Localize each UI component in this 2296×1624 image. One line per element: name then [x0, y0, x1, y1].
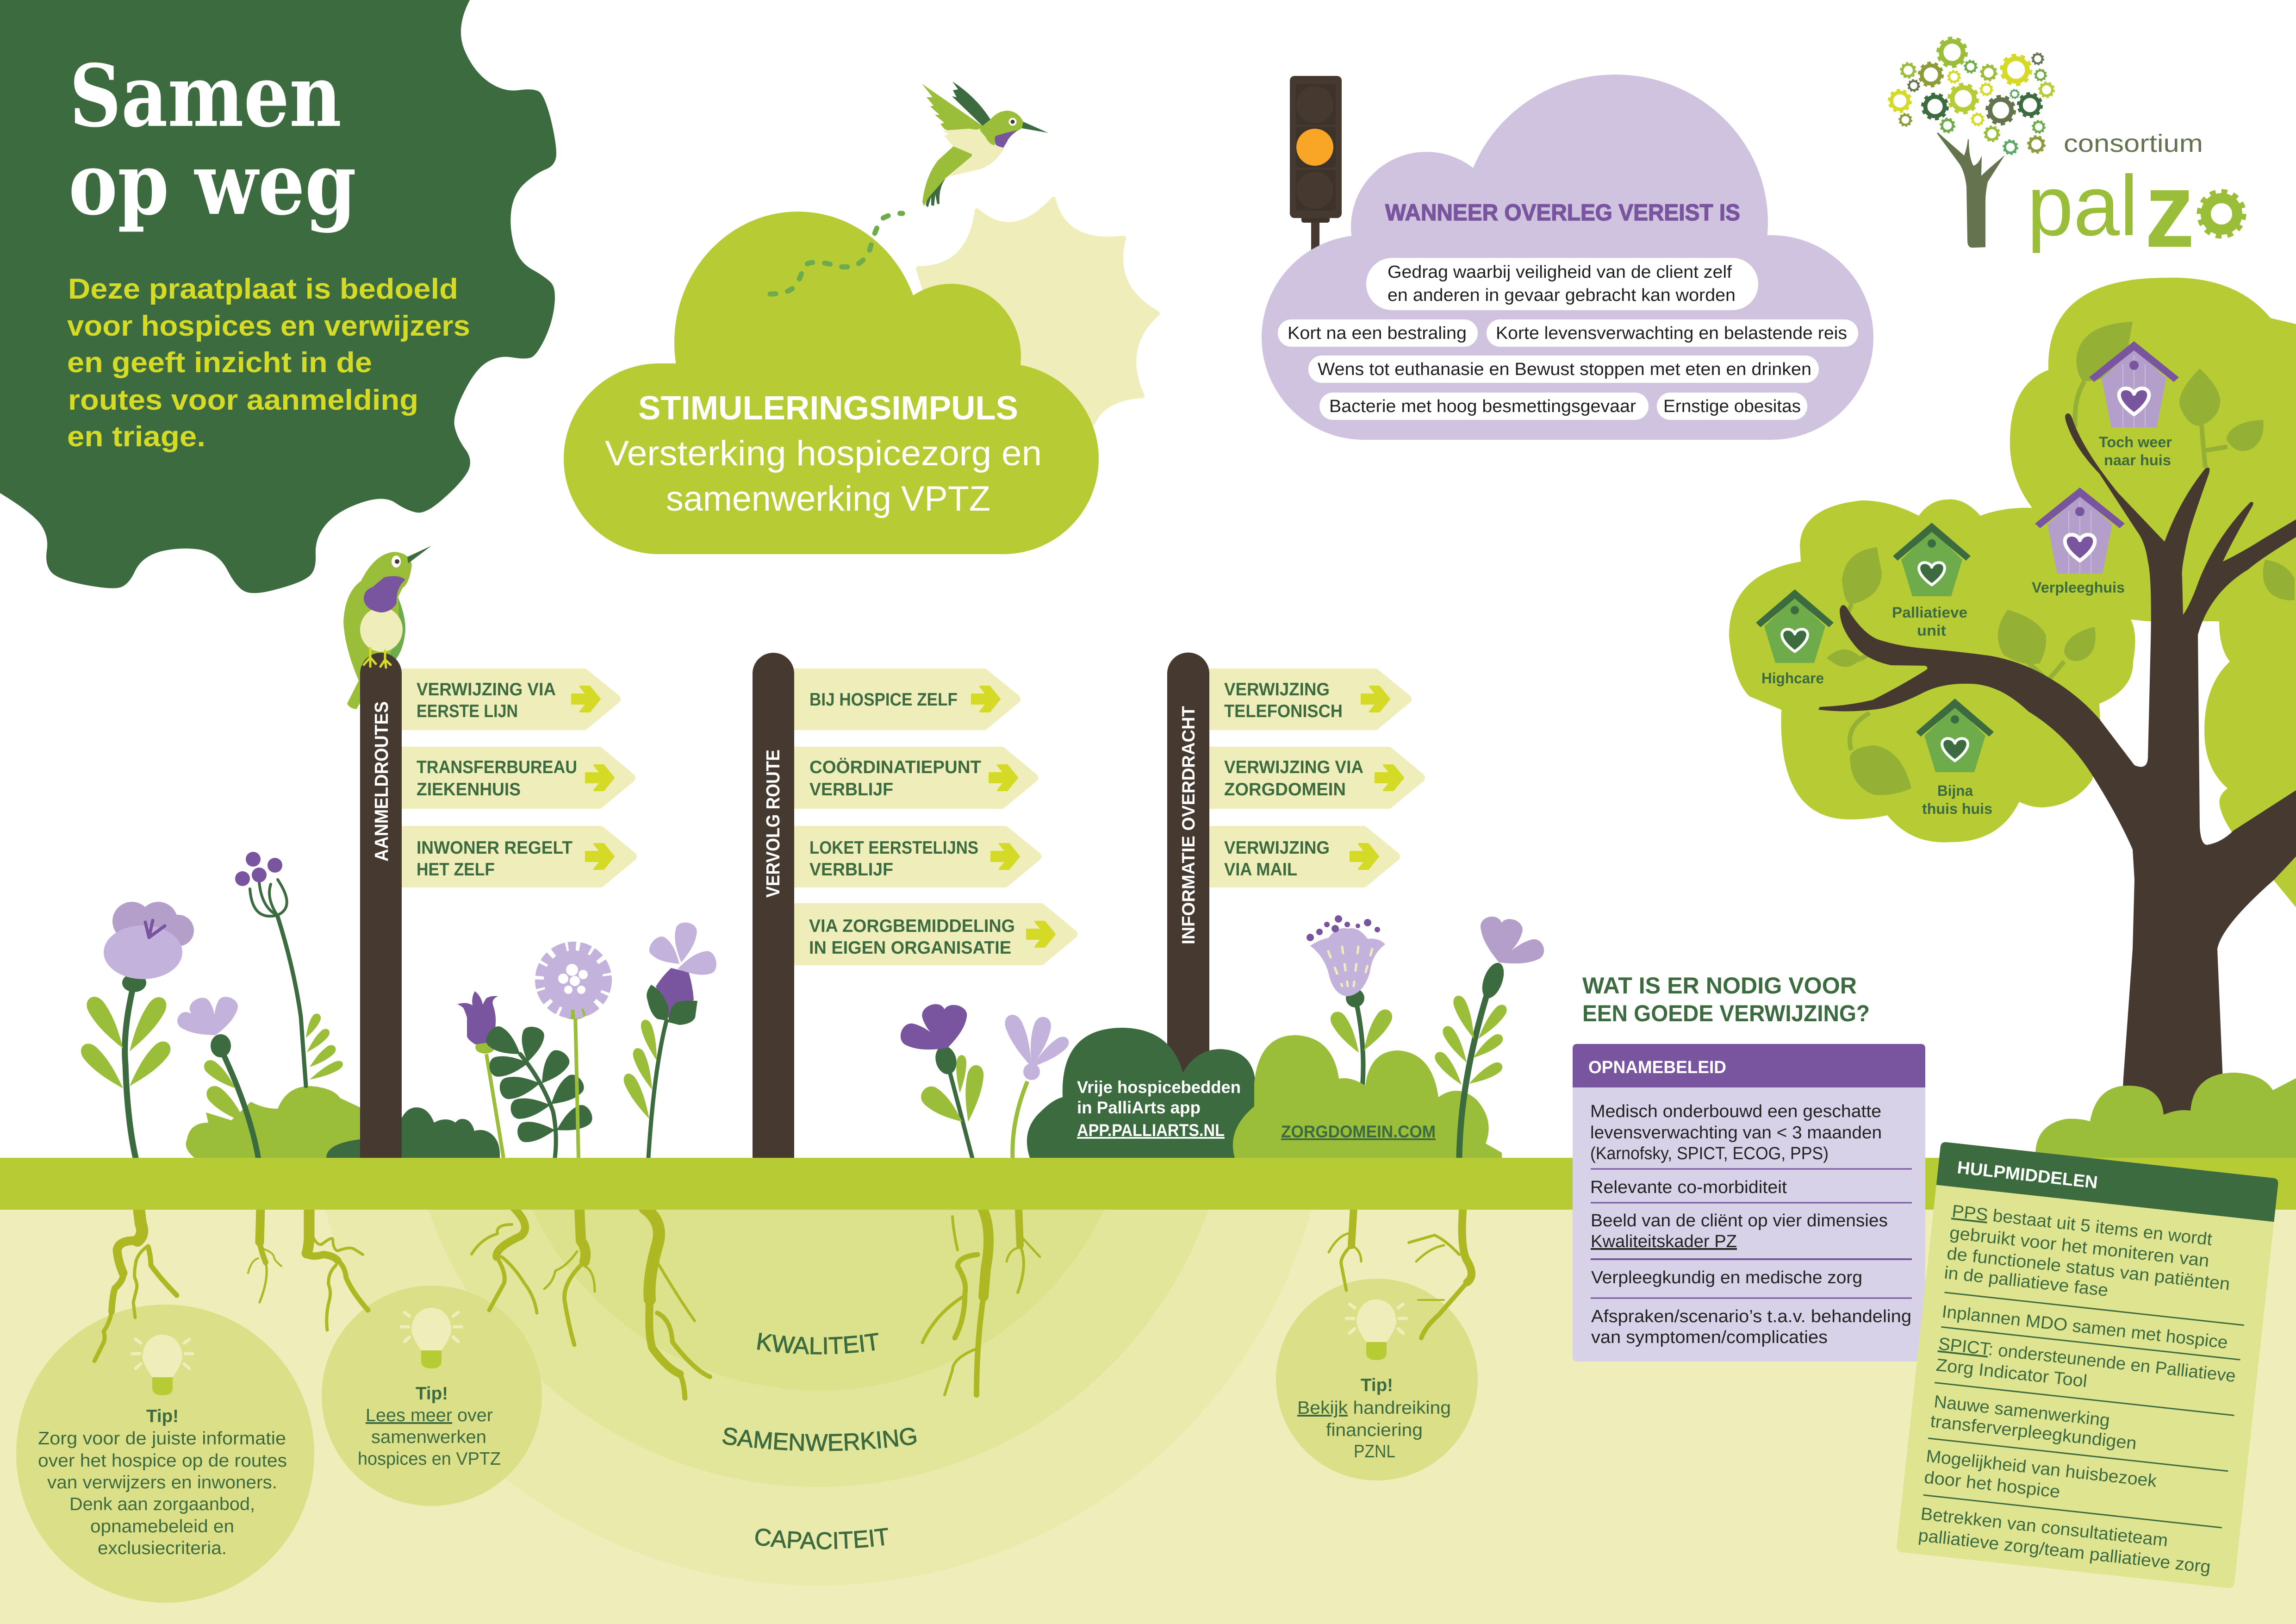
intro text: en triage.	[67, 421, 205, 453]
pill: gedrag: Gedrag waarbij veiligheid van de client zelf	[1388, 262, 1732, 282]
intro text: routes voor aanmelding	[68, 384, 418, 416]
icon: bird feet	[364, 648, 391, 668]
card list: Betrekken van consultatieteam	[1920, 1504, 2169, 1550]
bush: palliarts	[1027, 1028, 1256, 1158]
card list: gebruikt voor het moniteren van	[1948, 1223, 2210, 1271]
pill: bestraling	[1278, 319, 1478, 347]
palliarts text	[1077, 1078, 1241, 1140]
tip circle 1: Tip!	[146, 1406, 179, 1426]
overleg cloud	[1262, 75, 1873, 440]
sign: loket eerstelijns verblijf	[790, 831, 1037, 883]
sign: verwijzing via zorgdomein: ZORGDOMEIN	[1224, 780, 1346, 800]
flowers mid group	[897, 1001, 1072, 1158]
pill: gedrag	[1366, 258, 1758, 310]
card list: de functionele status van patiënten	[1946, 1244, 2231, 1294]
tip circle 2: Tip!	[416, 1384, 448, 1404]
sign: coordinatiepunt verblijf: COÖRDINATIEPUNT	[809, 757, 981, 777]
bush: light green	[186, 1086, 360, 1158]
sign: transferbureau ziekenhuis: TRANSFERBUREAU	[417, 757, 577, 777]
birdhouse: bijna thuis huis: Bijna	[1937, 782, 1973, 799]
birdhouse: bijna thuis huis: thuis huis	[1922, 800, 1992, 817]
tip circle 1: over het hospice op de routes	[38, 1451, 287, 1471]
signpost: vervolg route: VERVOLG ROUTE	[762, 750, 784, 898]
dotted flight path	[770, 213, 902, 294]
flower: small lilac	[174, 994, 258, 1158]
sign: coordinatiepunt verblijf: VERBLIJF	[809, 780, 893, 800]
cloud subtitle: samenwerking VPTZ	[666, 479, 990, 518]
bush: dark green	[326, 1107, 500, 1158]
sign: inwoner regelt het zelf: HET ZELF	[417, 860, 495, 880]
signpost: informatie overdracht: INFORMATIE OVERDRACHT	[1179, 706, 1199, 944]
panel: hulpmiddelen	[1896, 1142, 2279, 1589]
sign: bij hospice zelf	[790, 673, 1016, 725]
sign: transferbureau ziekenhuis	[398, 751, 631, 804]
birdhouse: highcare	[1756, 589, 1834, 687]
title: op weg	[68, 133, 356, 234]
cloud subtitle: Versterking hospicezorg en	[605, 434, 1042, 473]
tree trunk and branches	[1818, 413, 2296, 1158]
plant roots	[94, 1208, 1472, 1398]
sign: verwijzing via eerste lijn	[398, 673, 616, 725]
card list: Zorg Indicator Tool	[1935, 1355, 2088, 1391]
flower: dotted bell	[1307, 915, 1395, 1086]
title	[68, 45, 356, 234]
pill: obesitas	[1657, 393, 1807, 420]
plant: dark fern	[483, 1023, 596, 1158]
tree foliage	[1729, 278, 2296, 907]
tip circle 2: samenwerken	[371, 1427, 486, 1447]
cloud subtitle	[605, 434, 1042, 518]
panel header: OPNAMEBELEID	[1588, 1058, 1726, 1077]
intro text	[67, 273, 470, 453]
panel list: Beeld van de cliënt op vier dimensies	[1591, 1211, 1888, 1230]
intro text: voor hospices en verwijzers	[67, 310, 470, 342]
card list: Nauwe samenwerking	[1933, 1392, 2111, 1430]
signpost: informatie overdracht	[1167, 653, 1209, 1158]
sign: loket eerstelijns verblijf: VERBLIJF	[809, 860, 893, 880]
card header	[1936, 1142, 2279, 1222]
layer label: kwaliteit: KWALITEIT	[754, 1328, 882, 1360]
signposts column 3 signs	[1206, 673, 1420, 883]
logo: consortium palzo: z	[2145, 150, 2195, 269]
sign: verwijzing via zorgdomein: VERWIJZING VIA	[1224, 757, 1363, 777]
tip circle 1: Zorg voor de juiste informatie	[38, 1429, 286, 1449]
tip circle 2: hospices en VPTZ	[358, 1449, 501, 1469]
sign: verwijzing via zorgdomein	[1206, 751, 1420, 804]
sign: via zorgbemiddeling: VIA ZORGBEMIDDELING	[809, 916, 1015, 936]
card list: door het hospice	[1923, 1468, 2061, 1502]
tip circle 2	[322, 1286, 542, 1506]
pill: bestraling: Kort na een bestraling	[1288, 324, 1467, 343]
birdhouse: toch weer naar huis	[2089, 341, 2179, 468]
icon: perched hummingbird body	[343, 546, 431, 709]
pill: gedrag: en anderen in gevaar gebracht kan worden	[1388, 286, 1736, 305]
sign: inwoner regelt het zelf: INWONER REGELT	[417, 838, 572, 858]
tip circle 1: van verwijzers en inwoners.	[47, 1473, 277, 1493]
panel list: levensverwachting van < 3 maanden	[1590, 1123, 1882, 1143]
cloud heading: WANNEER OVERLEG VEREIST IS	[1385, 200, 1740, 225]
signposts column 1 signs	[398, 673, 632, 883]
birdhouse: verpleeghuis: Verpleeghuis	[2032, 579, 2125, 596]
heading: goede verwijzing	[1582, 973, 1870, 1026]
layer label: samenwerking: SAMENWERKING	[720, 1422, 919, 1456]
tree leaves	[1827, 322, 2295, 795]
heading: goede verwijzing: WAT IS ER NODIG VOOR	[1582, 973, 1857, 999]
sign: verwijzing via mail: VERWIJZING	[1224, 838, 1330, 858]
bush at tree base	[2035, 1073, 2296, 1158]
sign: verwijzing telefonisch	[1206, 673, 1407, 725]
sign: verwijzing via eerste lijn: VERWIJZING VIA	[417, 680, 556, 700]
sign: transferbureau ziekenhuis: ZIEKENHUIS	[417, 780, 521, 800]
card list: SPICT: ondersteunende en Palliatieve	[1937, 1334, 2237, 1386]
card list: Mogelijkheid van huisbezoek	[1925, 1447, 2158, 1491]
logo gear letter	[2199, 191, 2244, 237]
panel list: Verpleegkundig en medische zorg	[1591, 1268, 1862, 1287]
pill: obesitas: Ernstige obesitas	[1663, 397, 1801, 416]
panel list: Afspraken/scenario’s t.a.v. behandeling	[1591, 1307, 1911, 1326]
sign: via zorgbemiddeling	[790, 908, 1073, 961]
flower: big lilac	[77, 902, 194, 1158]
flower: dark purple	[897, 1001, 985, 1158]
birdhouse: verpleeghuis	[2032, 487, 2125, 596]
birdhouse: palliatieve unit: Palliatieve	[1892, 604, 1967, 621]
sign: verwijzing via mail	[1206, 831, 1395, 883]
soil with concentric layers	[0, 1210, 2296, 1624]
stimuleringsimpuls cloud	[564, 212, 1099, 554]
pill: bacterie: Bacterie met hoog besmettingsgevaar	[1329, 397, 1636, 416]
cloud heading: STIMULERINGSIMPULS	[638, 390, 1018, 427]
panel list: van symptomen/complicaties	[1591, 1328, 1828, 1347]
tip circle 1: opnamebeleid en	[90, 1517, 234, 1537]
icon: flying hummingbird	[922, 81, 1048, 207]
panel header	[1573, 1044, 1925, 1087]
birdhouse: bijna thuis huis	[1916, 699, 1994, 817]
flower: light lilac	[1002, 1012, 1072, 1158]
sign: verwijzing telefonisch: VERWIJZING	[1224, 680, 1330, 700]
layer label: capaciteit: CAPACITEIT	[753, 1523, 891, 1555]
tip circle 3: Bekijk handreiking	[1297, 1398, 1451, 1418]
intro text: en geeft inzicht in de	[67, 347, 372, 379]
panel list: Kwaliteitskader PZ	[1591, 1232, 1737, 1251]
title panel: gear shape	[0, 0, 556, 593]
traffic light	[1290, 76, 1342, 255]
sign: verwijzing via mail: VIA MAIL	[1224, 860, 1297, 880]
intro text: Deze praatplaat is bedoeld	[68, 273, 458, 305]
palliarts text: Vrije hospicebedden	[1077, 1078, 1241, 1097]
sign: inwoner regelt het zelf	[398, 831, 632, 883]
bush: zorgdomein	[1233, 1035, 1502, 1158]
panel list: (Karnofsky, SPICT, ECOG, PPS)	[1590, 1144, 1829, 1163]
tip circle 3: financiering	[1326, 1420, 1423, 1440]
plants left group	[77, 852, 718, 1158]
card list: palliatieve zorg/team palliatieve zorg	[1917, 1526, 2212, 1577]
card list: transferverpleegkundigen	[1929, 1412, 2138, 1454]
birdhouse: toch weer naar huis: Toch weer	[2099, 434, 2172, 450]
panel: opnamebeleid	[1573, 1044, 1925, 1362]
signposts column 2 signs	[790, 673, 1073, 961]
tip circle 3: PZNL	[1354, 1442, 1395, 1462]
logo: consortium palzo: pal	[2027, 158, 2138, 254]
card list: Inplannen MDO samen met hospice	[1941, 1302, 2229, 1353]
tip circle 1	[16, 1305, 314, 1603]
birdhouse: toch weer naar huis: naar huis	[2104, 452, 2171, 468]
tip circle 3	[1276, 1279, 1478, 1480]
flower: lilac on right stem	[1432, 915, 1547, 1158]
tip circle 1: Denk aan zorgaanbod,	[69, 1494, 255, 1514]
signpost: aanmeldroutes: AANMELDROUTES	[371, 701, 392, 862]
flower: purple bell	[457, 991, 504, 1158]
pill: levensverwachting	[1487, 319, 1858, 347]
birdhouse: palliatieve unit: unit	[1917, 622, 1946, 639]
card list: in de palliatieve fase	[1943, 1263, 2109, 1300]
pill: levensverwachting: Korte levensverwachting en belastende reis	[1496, 324, 1847, 343]
flower: purple with sepals	[621, 921, 718, 1158]
sign: loket eerstelijns verblijf: LOKET EERSTELIJNS	[809, 838, 978, 858]
title: Samen	[69, 45, 342, 146]
flower: pompom	[541, 948, 606, 1158]
pill: euthanasie: Wens tot euthanasie en Bewust stoppen met eten en drinken	[1318, 360, 1811, 379]
card header: HULPMIDDELEN	[1956, 1158, 2099, 1193]
tip circle 3: Tip!	[1361, 1375, 1393, 1395]
sign: via zorgbemiddeling: IN EIGEN ORGANISATIE	[809, 938, 1011, 958]
sign: verwijzing telefonisch: TELEFONISCH	[1224, 701, 1343, 721]
flower: berry stalk	[235, 852, 345, 1086]
panel list: Medisch onderbouwd een geschatte	[1590, 1102, 1881, 1121]
logo: consortium palzo	[1889, 38, 2244, 269]
sign: bij hospice zelf: BIJ HOSPICE ZELF	[809, 690, 958, 710]
signpost: aanmeldroutes	[360, 653, 402, 1158]
tip circle 2: Lees meer over	[366, 1405, 493, 1425]
palliarts text: in PalliArts app	[1077, 1098, 1201, 1117]
panel list: Relevante co-morbiditeit	[1590, 1178, 1787, 1197]
sign: coordinatiepunt verblijf	[790, 751, 1033, 804]
palliarts text: APP.PALLIARTS.NL	[1077, 1121, 1225, 1140]
zorgdomein link: ZORGDOMEIN.COM	[1281, 1122, 1436, 1141]
pill: bacterie	[1319, 393, 1649, 420]
card list	[1915, 1201, 2254, 1578]
birdhouse: palliatieve unit	[1892, 523, 1971, 639]
signpost: vervolg route	[753, 653, 794, 1158]
panel list	[1590, 1102, 1912, 1347]
tip circle 1: exclusiecriteria.	[98, 1538, 227, 1558]
sun	[918, 199, 1157, 423]
sign: verwijzing via eerste lijn: EERSTE LIJN	[417, 701, 518, 721]
heading: goede verwijzing: EEN GOEDE VERWIJZING?	[1582, 1000, 1870, 1026]
logo: consortium palzo: consortium	[2064, 130, 2203, 157]
birdhouse: highcare: Highcare	[1761, 670, 1824, 687]
card list: PPS bestaat uit 5 items en wordt	[1951, 1202, 2213, 1249]
ground band	[0, 1158, 2296, 1210]
pill: euthanasie	[1308, 356, 1819, 383]
